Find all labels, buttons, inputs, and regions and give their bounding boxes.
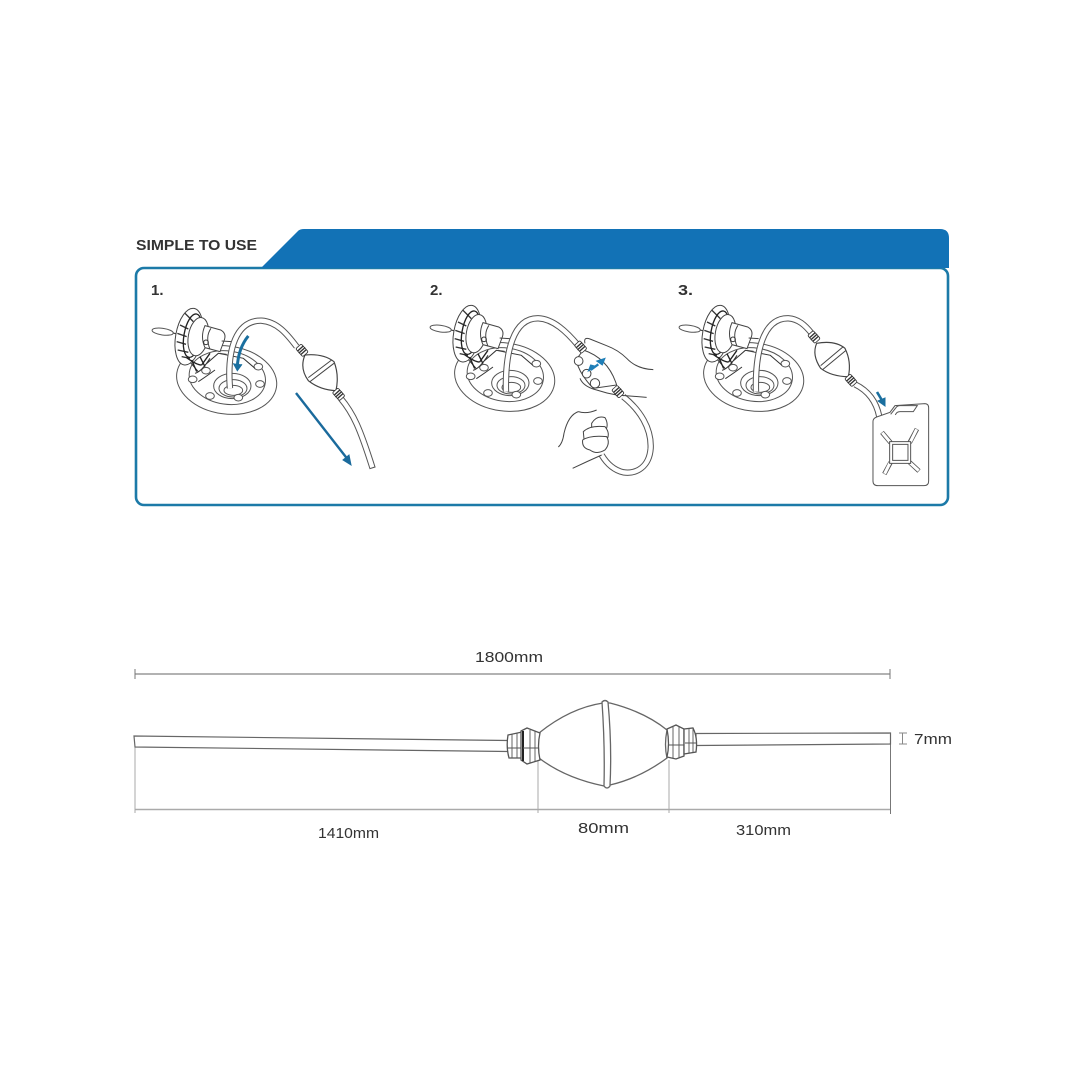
- step number 3: 3.: [678, 282, 693, 299]
- arrow: flow into can: [877, 392, 885, 406]
- hand squeezing bulb: [574, 338, 653, 398]
- step number 2: 2.: [430, 282, 443, 299]
- label: 310mm: 310mm: [736, 822, 791, 839]
- dimension: overall length: [135, 669, 890, 679]
- hand holding hose: [558, 410, 608, 468]
- fuel tank with cap: [430, 303, 559, 418]
- fuel tank with cap: [152, 306, 281, 421]
- blue squeeze arrows: [588, 358, 605, 371]
- panel border: [136, 268, 948, 505]
- step number 1: 1.: [151, 282, 164, 299]
- hose and bulb: [756, 318, 879, 417]
- label: 80mm: 80mm: [578, 820, 629, 837]
- arrow: into tank: [233, 336, 248, 371]
- dimension diagram: [134, 649, 952, 842]
- long hose section: [134, 736, 508, 752]
- heading: SIMPLE TO USE: [136, 237, 257, 254]
- dimension: segments: [135, 808, 890, 810]
- step 3 illustration: [678, 282, 929, 486]
- bulb: [538, 700, 667, 788]
- header banner: [261, 229, 949, 268]
- label: 1410mm: 1410mm: [318, 825, 379, 842]
- left connector: [507, 728, 540, 764]
- jerry can: [873, 404, 929, 486]
- right connector: [667, 725, 697, 759]
- hose: [506, 318, 651, 473]
- label: 1800mm: 1800mm: [475, 649, 543, 666]
- arrow: pull hose: [296, 393, 351, 465]
- short hose section: [696, 733, 890, 746]
- label: 7mm: 7mm: [914, 731, 952, 748]
- step 2 illustration: [430, 282, 653, 473]
- panel: simple to use: [136, 229, 949, 505]
- extension lines: [135, 733, 890, 814]
- hose and bulb: [229, 321, 373, 468]
- dimension: hose diameter: [899, 733, 907, 744]
- fuel tank with cap: [679, 303, 808, 418]
- step 1 illustration: [151, 282, 373, 468]
- bulb band: [602, 700, 611, 788]
